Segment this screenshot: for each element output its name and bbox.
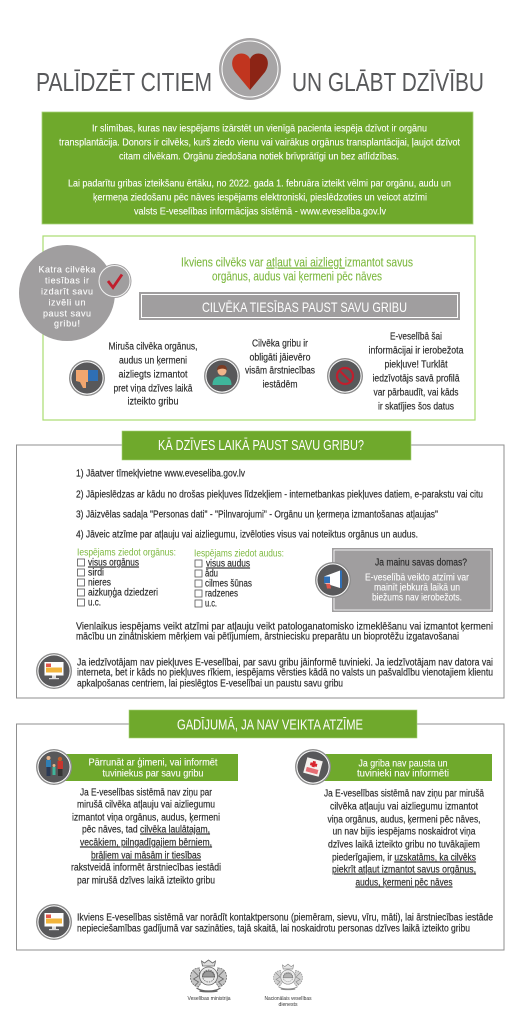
checklist: organs: aizkuņģa dziedzeri bbox=[88, 586, 158, 598]
text: relatives' rights: Ja E-veselības sistēmā nav ziņu par bbox=[80, 788, 213, 798]
text: presumed consent: Ja E-veselības sistēmā nav ziņu par mirušā bbox=[324, 788, 484, 800]
panel: how to express will during lifetime bbox=[16, 431, 504, 698]
text: presumed consent: piekrīt atļaut izmantot savus orgānus, bbox=[332, 864, 476, 876]
steps list: 3) Jāizvēlas sadaļa "Personas dati" - "Pilnvarojumi" - Orgānu un ķermeņa izmantošanas atļaujas" bbox=[76, 510, 438, 520]
panel: introduction: citam cilvēkam. Orgānu ziedošana notiek brīvprātīgi un bez atlīdzības. bbox=[119, 152, 399, 162]
logo: National Health Service bbox=[264, 964, 312, 1008]
panel: introduction: Lai padarītu gribas izteikšanu ērtāku, no 2022. gada 1. februāra izteikt vēlmi par orgānu, audu un bbox=[68, 178, 451, 190]
text: presumed consent bbox=[324, 788, 484, 888]
icon: megaphone bbox=[315, 562, 351, 598]
text: presumed consent: piederīgajiem, ir uzskatāms, ka cilvēks bbox=[332, 852, 476, 864]
banner: right to express will: CILVĒKA TIESĪBAS PAUST SAVU GRIBU bbox=[202, 299, 407, 315]
heading: how to express will: KĀ DZĪVES LAIKĀ PAUST SAVU GRIBU? bbox=[158, 437, 364, 454]
panel: introduction bbox=[42, 112, 473, 224]
text: deceased person's wish: Miruša cilvēka orgānus, bbox=[108, 342, 198, 352]
checklist: tissues: Iespējams ziedot audus: bbox=[194, 548, 284, 560]
panel: introduction: Ir slimības, kuras nav iespējams izārstēt un vienīgā pacienta iespēja dzīvot ir orgānu bbox=[92, 124, 427, 134]
callout: change of mind: mainīt jebkurā laikā un bbox=[374, 582, 460, 594]
text: presumed consent: cilvēka atļauju vai aizliegumu izmantot bbox=[330, 802, 478, 812]
text: presumed consent: viņa orgānus, audus, ķermeni pēc nāves, bbox=[328, 814, 480, 826]
text: must be respected: visām ārstniecības bbox=[245, 366, 315, 376]
subheading: talk to family bbox=[62, 754, 238, 781]
text: limited access bbox=[368, 332, 464, 412]
callout: every person's right: paust savu bbox=[43, 308, 91, 318]
callout: change of mind bbox=[332, 548, 493, 612]
icon: computer bbox=[36, 653, 72, 689]
steps list: 1) Jāatver tīmekļvietne www.eveseliba.gov.lv bbox=[76, 468, 245, 480]
text: relatives' rights: brāļiem vai māsām ir tiesības bbox=[91, 850, 201, 862]
text: deceased person's wish bbox=[108, 342, 198, 408]
checklist: organs: sirdi bbox=[88, 568, 104, 578]
checklist: tissues: visus audus bbox=[206, 558, 250, 570]
text: limited access: ir skatījies šos datus bbox=[378, 402, 454, 412]
checklist: tissues: u.c. bbox=[205, 598, 217, 610]
text: relatives' rights: mirušā cilvēka atļauju vai aizliegumu bbox=[77, 800, 215, 810]
text: must be respected: obligāti jāievēro bbox=[250, 352, 311, 364]
text: additional consents: Vienlaikus iespējams veikt atzīmi par atļauju veikt patologanatomisko izmeklēšanu vai izmantot ķermeni bbox=[76, 622, 493, 632]
checklist: tissues: ādu bbox=[205, 568, 218, 580]
heading: if no record bbox=[129, 710, 417, 738]
title bbox=[36, 67, 484, 97]
logo: National Health Service: dienests bbox=[278, 1002, 298, 1008]
panel: right to express will bbox=[19, 236, 475, 420]
text: relatives' rights: izmantot viņa orgānus, audus, ķermeni bbox=[72, 812, 220, 824]
callout: every person's right: izdarīt savu bbox=[41, 286, 93, 296]
text: must be respected: iestādēm bbox=[262, 380, 298, 390]
panel: when no record has been made bbox=[16, 710, 504, 950]
callout: change of mind: E-veselībā veikto atzīmi var bbox=[365, 572, 470, 584]
subheading: will not expressed bbox=[320, 754, 492, 781]
banner: right to express will bbox=[139, 292, 460, 320]
checklist: organs: Iespējams ziedot orgānus: bbox=[77, 548, 176, 558]
text: must be respected: Cilvēka gribu ir bbox=[252, 338, 309, 350]
text: relatives' rights bbox=[71, 788, 221, 886]
icon: thumbs down bbox=[69, 360, 105, 396]
callout: every person's right: tiesības ir bbox=[45, 276, 89, 286]
text: limited access: var pārbaudīt, vai kāds bbox=[374, 388, 458, 398]
panel: introduction: ķermeņa ziedošanu pēc nāves iespējams elektroniski, pieslēdzoties un veicot atzīmi bbox=[93, 192, 427, 204]
icon: family bbox=[36, 749, 72, 785]
steps list: 4) Jāveic atzīme par atļauju vai aizliegumu, izvēloties visus vai noteiktus orgānus un audus. bbox=[76, 530, 418, 540]
checklist: tissues bbox=[194, 548, 284, 610]
text: relatives' rights: rakstveidā informēt ārstniecības iestādi bbox=[71, 862, 221, 874]
subheading: talk to family: Pārrunāt ar ģimeni, vai informēt bbox=[88, 756, 218, 768]
icon: prohibited bbox=[327, 358, 363, 394]
text: presumed consent: un nav bijis iespējams noskaidrot viņa bbox=[332, 826, 476, 838]
icon: document bbox=[295, 749, 331, 785]
checklist: organs bbox=[77, 548, 176, 608]
callout: change of mind: Ja mainu savas domas? bbox=[375, 558, 467, 568]
logo: National Health Service: Nacionālais veselības bbox=[264, 996, 312, 1002]
heading: how to express will bbox=[122, 431, 411, 460]
panel: introduction: valsts E-veselības informācijas sistēmā - www.eveseliba.gov.lv bbox=[134, 206, 386, 218]
checklist: tissues: cilmes šūnas bbox=[205, 578, 252, 590]
steps list bbox=[76, 468, 483, 540]
icon: computer contact bbox=[36, 904, 72, 940]
callout: every person's right: Katra cilvēka bbox=[38, 264, 96, 274]
title: PALĪDZĒT CITIEM bbox=[36, 67, 212, 97]
text: relatives' rights: par mirušā dzīves laikā izteikto gribu bbox=[77, 876, 215, 886]
subheading: will not expressed: tuvinieki nav informēti bbox=[357, 768, 449, 780]
heading: allow or forbid: Ikviens cilvēks var atļaut vai aizliegt izmantot savus bbox=[181, 256, 413, 270]
text: no access to E-health bbox=[77, 658, 493, 690]
text: additional consents bbox=[76, 622, 493, 642]
callout: every person's right: izvēli un bbox=[48, 298, 86, 308]
icon: check mark bbox=[98, 264, 132, 298]
checklist: organs: u.c. bbox=[88, 598, 101, 608]
icon: heart bbox=[219, 38, 281, 100]
heading: if no record: GADĪJUMĀ, JA NAV VEIKTA ATZĪME bbox=[177, 716, 363, 734]
heading: allow or forbid: orgānus, audus vai ķermeni pēc nāves bbox=[212, 270, 382, 284]
checklist: organs: nieres bbox=[88, 578, 111, 588]
text: deceased person's wish: aizliegts izmantot bbox=[118, 370, 188, 380]
title: UN GLĀBT DZĪVĪBU bbox=[292, 67, 484, 97]
text: deceased person's wish: pret viņa dzīves laikā bbox=[114, 384, 193, 394]
text: contact person bbox=[77, 912, 493, 934]
checklist: tissues: radzenes bbox=[205, 588, 238, 600]
text: presumed consent: dzīves laikā izteikto gribu no tuvākajiem bbox=[328, 840, 480, 850]
text: relatives' rights: vecākiem, pilngadīgajiem bērniem, bbox=[80, 838, 212, 848]
text: must be respected bbox=[245, 338, 315, 390]
checklist: organs: visus orgānus bbox=[88, 558, 139, 568]
logo: Ministry of Health bbox=[188, 960, 231, 1002]
text: limited access: iedzīvotājs savā profilā bbox=[372, 374, 460, 384]
callout: every person's right bbox=[19, 245, 115, 341]
text: presumed consent: audus, ķermeni pēc nāves bbox=[356, 878, 452, 888]
text: limited access: piekļuve! Turklāt bbox=[384, 360, 448, 370]
text: limited access: E-veselībā šai bbox=[390, 332, 442, 342]
text: limited access: informācijai ir ierobežota bbox=[368, 346, 464, 356]
subheading: will not expressed: Ja griba nav pausta un bbox=[358, 758, 448, 770]
text: relatives' rights: pēc nāves, tad cilvēka laulātajam, bbox=[82, 824, 210, 836]
text: deceased person's wish: audus un ķermeni bbox=[119, 356, 187, 366]
subheading: talk to family: tuviniekus par savu gribu bbox=[102, 768, 204, 780]
callout: every person's right: gribu! bbox=[54, 318, 80, 328]
heading: allow or forbid bbox=[181, 256, 413, 284]
logo: Ministry of Health: Veselības ministrija bbox=[188, 996, 231, 1002]
callout: change of mind: biežums nav ierobežots. bbox=[372, 592, 462, 604]
text: deceased person's wish: izteikto gribu bbox=[128, 396, 178, 408]
icon: doctor bbox=[204, 358, 240, 394]
text: contact person: nepieciešamības gadījumā var sazināties, tajā skaitā, lai noskaidrotu personas dzīves laikā izteikto gribu bbox=[77, 924, 470, 934]
text: additional consents: mācību un zinātniskiem mērķiem vai pētījumiem, ārstniecisku preparātu un bioprotēžu izgatavošanai bbox=[76, 632, 459, 642]
panel: introduction: transplantācija. Donors ir cilvēks, kurš ziedo vienu vai vairākus orgānus transplantācijai, ļaujot dzīvot bbox=[59, 138, 460, 148]
text: no access to E-health: apkalpošanas centriem, lai pieslēgtos E-veselībai un paustu savu gribu bbox=[77, 678, 343, 690]
